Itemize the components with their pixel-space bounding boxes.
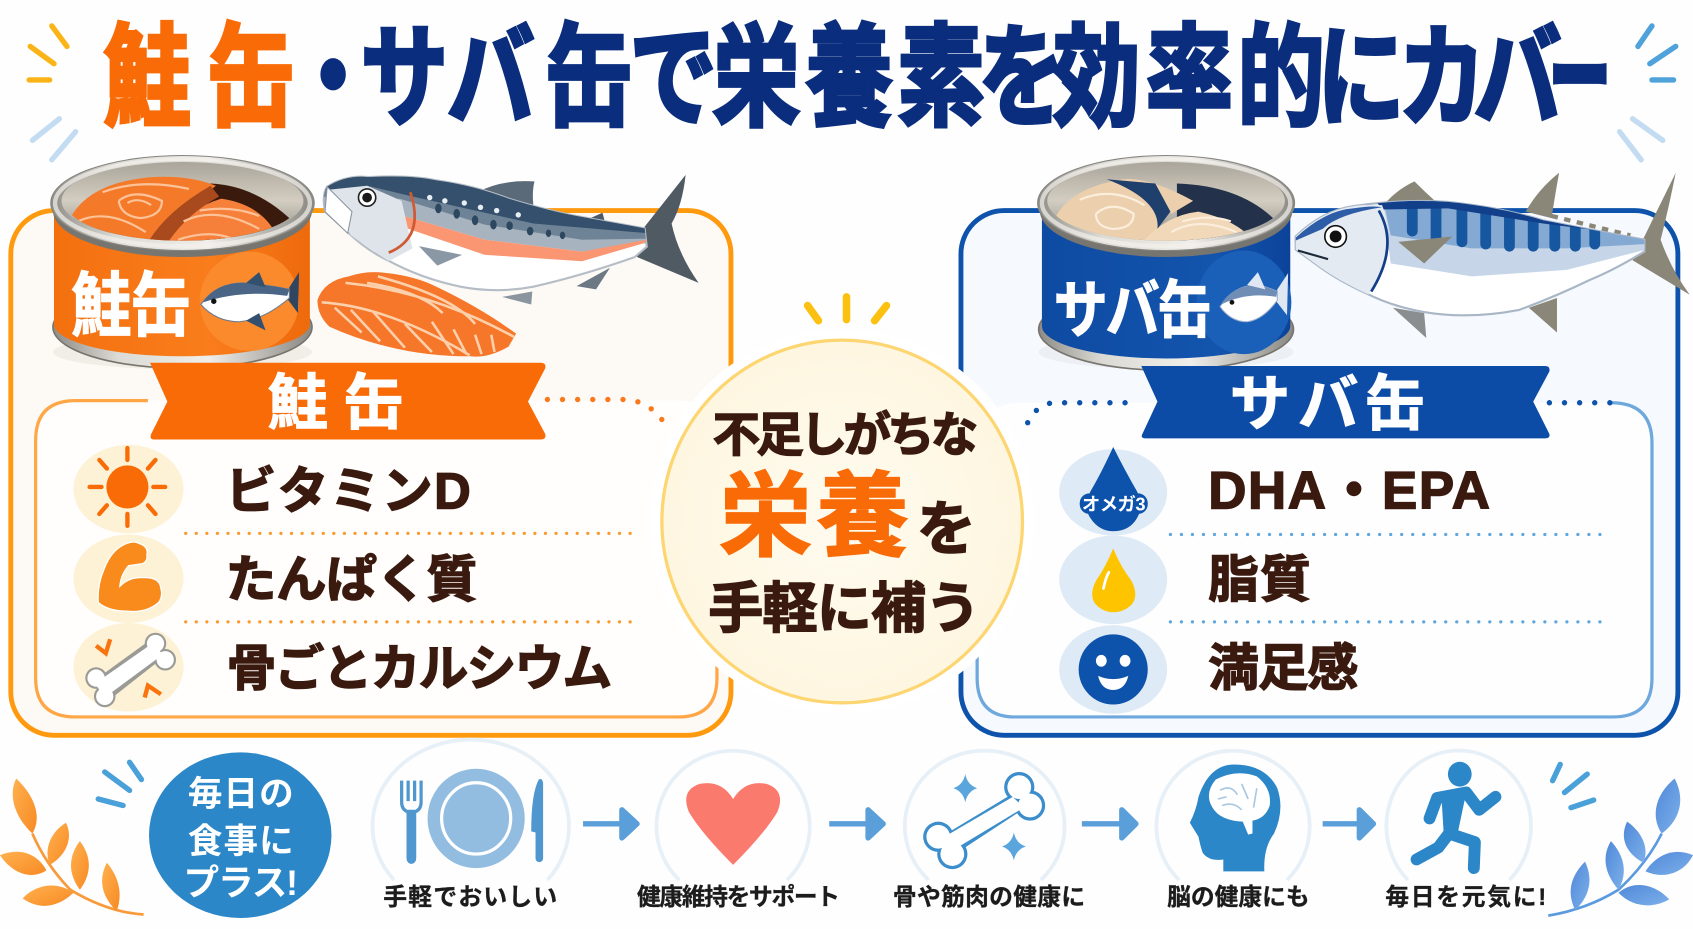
- nutrient row: calcium: [73, 623, 612, 712]
- caption: 手軽でおいしい: [383, 884, 557, 911]
- badge: 毎日の食事にプラス: 食事に: [188, 823, 294, 861]
- icon: sun: [73, 445, 184, 533]
- nutrient row: vitamin D: [73, 445, 471, 533]
- arrow: [1323, 810, 1373, 838]
- icon: plate and cutlery: [402, 769, 543, 868]
- nutrient row: protein: [73, 534, 477, 623]
- nutrient row: satisfaction: 満足感: [1208, 640, 1358, 697]
- banner: mackerel can: サバ缶: [1230, 369, 1425, 437]
- arrow: [829, 810, 883, 838]
- inner list box: [36, 401, 717, 717]
- step 4: brain: [1156, 751, 1310, 911]
- center badge: を: [917, 496, 976, 563]
- step 3: bones and muscle: [893, 751, 1085, 911]
- connector dots: [1024, 403, 1611, 434]
- icon: omega-3 drop: [1059, 447, 1167, 536]
- rays: lower left: [98, 762, 141, 805]
- nutrient row: fat: 脂質: [1208, 551, 1311, 608]
- caption: 骨や筋肉の健康に: [893, 884, 1085, 911]
- center badge: 手軽に補う: [708, 577, 980, 639]
- salmon fillet: [317, 272, 516, 357]
- mackerel fish: [1290, 173, 1690, 338]
- icon: heart: [686, 783, 780, 865]
- salmon can: [51, 155, 314, 369]
- center badge: [650, 329, 1034, 714]
- arrow: [583, 810, 637, 838]
- nutrient row: fat: [1059, 536, 1311, 624]
- caption: 脳の健康にも: [1167, 884, 1310, 911]
- step 1: meal: [373, 740, 569, 911]
- title: 鮭缶: [104, 18, 295, 141]
- step 5: runner: [1385, 751, 1546, 911]
- caption: 毎日を元気に!: [1385, 884, 1546, 911]
- icon: omega-3 drop: オメガ3: [1082, 494, 1146, 515]
- caption: 健康維持をサポート: [637, 884, 840, 911]
- badge: 毎日の食事にプラス: 毎日の: [188, 775, 294, 813]
- nutrient row: satisfaction: [1059, 625, 1358, 714]
- icon: bone: [73, 623, 184, 712]
- center badge: 不足しがちな: [713, 409, 978, 462]
- can label text: 鮭缶: [71, 267, 191, 345]
- center badge: 栄養: [719, 465, 909, 569]
- connector dots: [547, 400, 669, 432]
- title: ー: [1548, 17, 1611, 141]
- small fish: [201, 272, 299, 330]
- decorative rays: title right: [1620, 26, 1676, 160]
- leaves: right sprig: [1548, 778, 1693, 916]
- rays: lower right: [1553, 764, 1594, 808]
- step 2: health: [637, 751, 840, 911]
- banner: salmon can: 鮭缶: [268, 368, 404, 436]
- nutrient row: DHA EPA: [1059, 447, 1490, 536]
- icon: sparkle rays above center: [808, 297, 886, 321]
- title: ・サバ缶で栄養素を効率的にカバ: [289, 18, 1561, 141]
- arrow: [1082, 810, 1136, 838]
- badge: 毎日の食事にプラス: [149, 752, 331, 918]
- banner: mackerel can: [1141, 366, 1550, 438]
- nutrient row: protein: たんぱく質: [226, 551, 477, 608]
- icon: muscle arm: [73, 534, 184, 623]
- panel: salmon can: [11, 155, 731, 735]
- small fish: [1220, 272, 1288, 322]
- decorative rays: title left: [29, 26, 76, 160]
- banner: salmon can: [150, 363, 545, 439]
- nutrient row: calcium: 骨ごとカルシウム: [227, 641, 612, 697]
- icon: oil drop: [1059, 536, 1167, 624]
- nutrient row: vitamin D: ビタミンD: [226, 463, 471, 520]
- icon: bone with sparkles: [923, 772, 1045, 869]
- can label text: サバ缶: [1054, 276, 1211, 346]
- mackerel can: [1038, 155, 1295, 370]
- nutrient row: DHA EPA: DHA・EPA: [1208, 462, 1490, 521]
- badge: 毎日の食事にプラス: プラス!: [184, 863, 298, 903]
- inner list box: [977, 403, 1652, 717]
- icon: smile face: [1059, 625, 1167, 714]
- salmon fish: [319, 167, 699, 304]
- icon: head with brain: [1190, 764, 1280, 871]
- icon: running person: [1417, 762, 1495, 868]
- leaves: left sprig: [0, 778, 144, 915]
